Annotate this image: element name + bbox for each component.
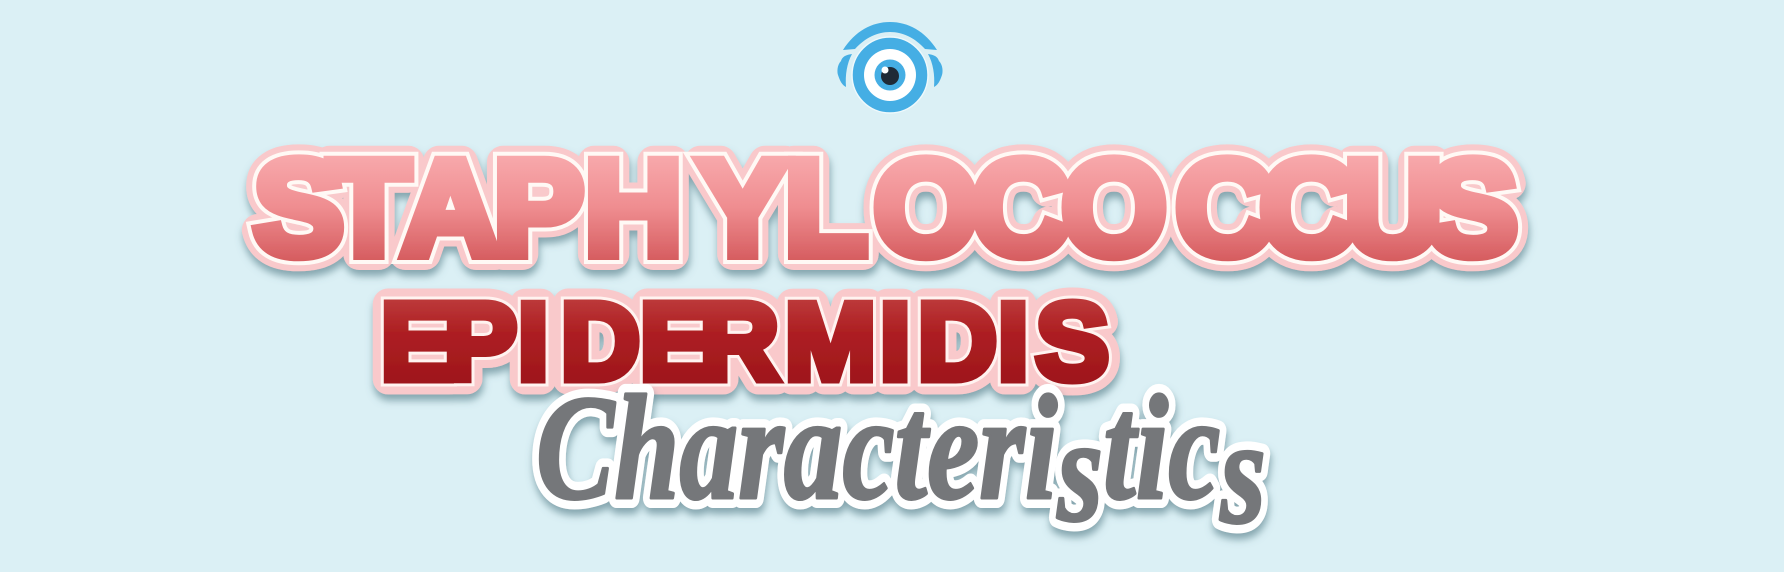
heading: Characteristics script: Characteristics <box>536 365 1266 555</box>
heading: EPIDERMIDIS: EPIDERMIDIS <box>381 281 1109 403</box>
icon: highlight <box>882 66 888 74</box>
heading: EPIDERMIDIS: EPIDERMIDIS <box>381 281 1109 403</box>
heading: STAPHYLOCOCCUS: STAPHYLOCOCCUS <box>254 134 1517 283</box>
heading: STAPHYLOCOCCUS: STAPHYLOCOCCUS <box>254 134 1517 283</box>
icon: right ear cup <box>928 54 943 87</box>
icon: iris <box>874 60 906 90</box>
icon: pupil <box>881 67 899 85</box>
icon: eye white <box>864 49 916 101</box>
heading: STAPHYLOCOCCUS: STAPHYLOCOCCUS <box>254 134 1517 283</box>
heading: EPIDERMIDIS: EPIDERMIDIS <box>381 281 1109 403</box>
icon: headband <box>843 22 937 50</box>
icon: eye with headphones logo <box>837 22 943 113</box>
heading: Characteristics script: Characteristics <box>536 365 1266 555</box>
icon: left ear cup <box>837 54 852 87</box>
icon: eye ring <box>852 37 928 113</box>
